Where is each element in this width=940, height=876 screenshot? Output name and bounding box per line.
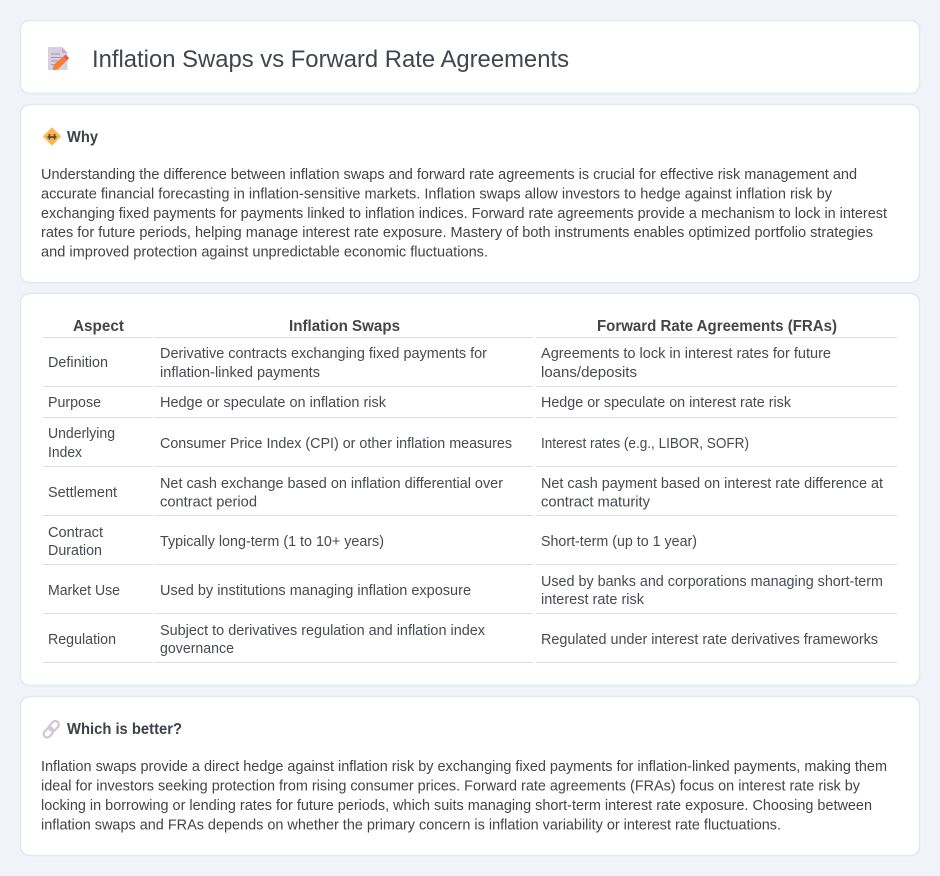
text block: why paragraph: Understanding the difference between inflation swaps and forward rate agreements is crucial for effective risk management and [41,167,857,183]
row: settlement: contract period [160,494,257,510]
row: regulation: Regulation [48,632,116,648]
row: purpose: Hedge or speculate on inflation risk [160,395,387,411]
row: settlement: Net cash exchange based on inflation differential over [160,476,503,492]
text block: which is better paragraph: ideal for investors seeking protection from rising consumer prices. Forward rate agreements (FRAs) focus on interest rate risk by [41,778,861,794]
panel: why [20,104,920,282]
text block: why paragraph: rates for future periods, helping manage interest rate exposure. Mastery of both instruments enables optimized portfolio strategies [41,225,873,241]
row: contract duration [48,525,697,559]
row: market use: interest rate risk [541,592,645,608]
panel: which is better [20,696,920,856]
title: Inflation Swaps vs Forward Rate Agreements [92,46,569,73]
row: underlying index: Underlying [48,426,115,442]
row: definition: Agreements to lock in interest rates for future [541,346,831,362]
row: underlying index: Index [48,445,83,461]
row: definition: loans/deposits [541,365,637,381]
row: regulation: Subject to derivatives regulation and inflation index [160,623,486,639]
row: settlement [48,476,883,510]
row: definition [48,346,831,381]
row: purpose: Purpose [48,395,101,411]
row: regulation: governance [160,641,234,657]
row: contract duration: Duration [48,543,102,559]
text block: which is better paragraph: locking in borrowing or lending rates for future periods, which suits managing short-term interest rate exposure. Choosing between [41,798,872,814]
heading: why: Why [67,129,98,146]
row: settlement: Net cash payment based on interest rate difference at [541,476,883,492]
row: market use: Used by banks and corporations managing short-term [541,574,883,590]
panel: title header [20,20,920,94]
row: definition: inflation-linked payments [160,365,320,381]
row: market use [48,574,883,608]
row: regulation: Regulated under interest rate derivatives frameworks [541,632,878,648]
text block: why paragraph: accurate financial forecasting in inflation-sensitive markets. Inflation swaps allow investors to hedge against inflation risk by [41,186,833,202]
row: definition: Definition [48,355,108,371]
row: underlying index [48,426,749,461]
row: market use: Market Use [48,583,120,599]
icon: document with pencil [48,47,69,70]
row: contract duration: Typically long-term (1 to 10+ years) [160,534,384,550]
row: settlement: Settlement [48,485,117,501]
table header row: Aspect [73,318,125,335]
row: contract duration: Contract [48,525,103,541]
icon: chain link [42,720,60,739]
row: market use: Used by institutions managing inflation exposure [160,583,471,599]
icon: diamond sign [44,128,60,145]
row: underlying index: Interest rates (e.g., LIBOR, SOFR) [541,436,749,452]
row: underlying index: Consumer Price Index (CPI) or other inflation measures [160,436,512,452]
text block: which is better paragraph: Inflation swaps provide a direct hedge against inflation risk by exchanging fixed payments for inflation-linked payments, making them [41,759,887,775]
row: definition: Derivative contracts exchanging fixed payments for [160,346,487,362]
table header row: Forward Rate Agreements (FRAs) [597,318,837,335]
row: contract duration: Short-term (up to 1 year) [541,534,697,550]
text block: why paragraph: exchanging fixed payments for payments linked to inflation indices. Forward rate agreements provide a mechanism to lock in interest [41,206,887,222]
panel: comparison table [20,294,920,686]
row: purpose [48,395,792,411]
row: settlement: contract maturity [541,494,651,510]
heading: which is better: Which is better? [67,721,182,738]
row: regulation [48,623,878,657]
text block: which is better paragraph: inflation swaps and FRAs depends on whether the primary concern is inflation variability or interest rate fluctuations. [41,818,781,834]
row: purpose: Hedge or speculate on interest rate risk [541,395,792,411]
text block: why paragraph [41,167,887,261]
table header row: Inflation Swaps [289,318,400,335]
table header row [73,318,837,335]
text block: why paragraph: and improved protection against unpredictable economic fluctuations. [41,245,488,261]
text block: which is better paragraph [41,759,887,834]
